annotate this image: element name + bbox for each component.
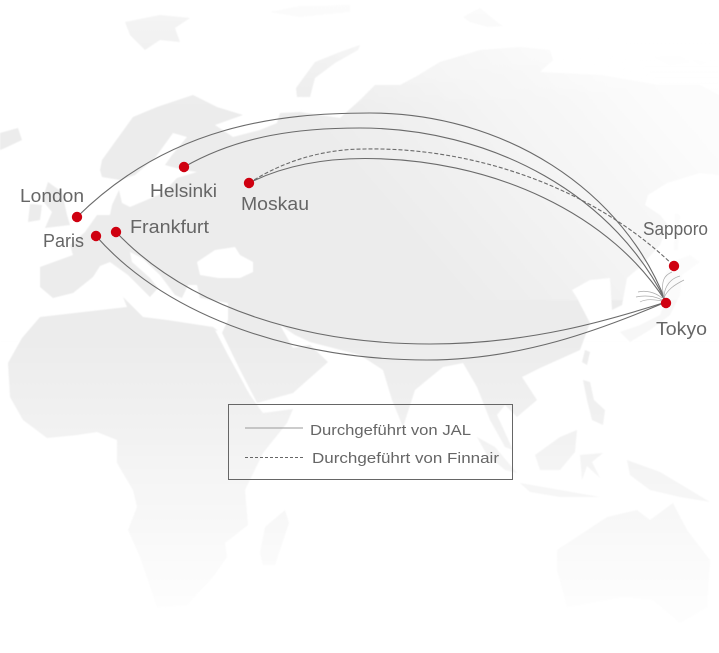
legend label: JAL: Durchgeführt von JAL: [310, 422, 471, 439]
marker: Helsinki: [179, 162, 189, 172]
inland and marginal seas: [197, 247, 262, 412]
Tokyo route fan detail: [636, 272, 684, 302]
legend sample: JAL: [245, 427, 303, 429]
label: London: London: [20, 186, 84, 206]
legend: [228, 404, 512, 480]
route: London to Tokyo: [77, 113, 666, 302]
label: Sapporo: Sapporo: [643, 219, 708, 239]
label: Moskau: Moskau: [241, 194, 309, 214]
map fade overlays: [0, 340, 719, 653]
legend label: Finnair: Durchgeführt von Finnair: [312, 450, 499, 467]
marker: Frankfurt: [111, 227, 121, 237]
route: Frankfurt to Tokyo: [116, 232, 666, 344]
marker: Sapporo: [669, 261, 679, 271]
label: Paris: Paris: [43, 231, 84, 251]
marker: Moskau: [244, 178, 254, 188]
legend sample: Finnair: [245, 456, 303, 458]
label: Helsinki: Helsinki: [150, 181, 217, 201]
marker: Paris: [91, 231, 101, 241]
marker: London: [72, 212, 82, 222]
city markers: [72, 162, 679, 308]
marker: Tokyo: [661, 298, 671, 308]
route: Paris to Tokyo: [96, 236, 666, 360]
flight routes: [77, 113, 674, 360]
route: Moskau to Tokyo: [249, 158, 666, 302]
city labels: [20, 181, 708, 339]
legend frame: [228, 404, 512, 480]
route: Helsinki to Tokyo: [184, 128, 666, 302]
label: Tokyo: Tokyo: [656, 319, 707, 339]
route: Moskau to Sapporo: [249, 149, 674, 266]
label: Frankfurt: Frankfurt: [130, 217, 209, 237]
faint northern islands and Japan: [270, 5, 707, 342]
